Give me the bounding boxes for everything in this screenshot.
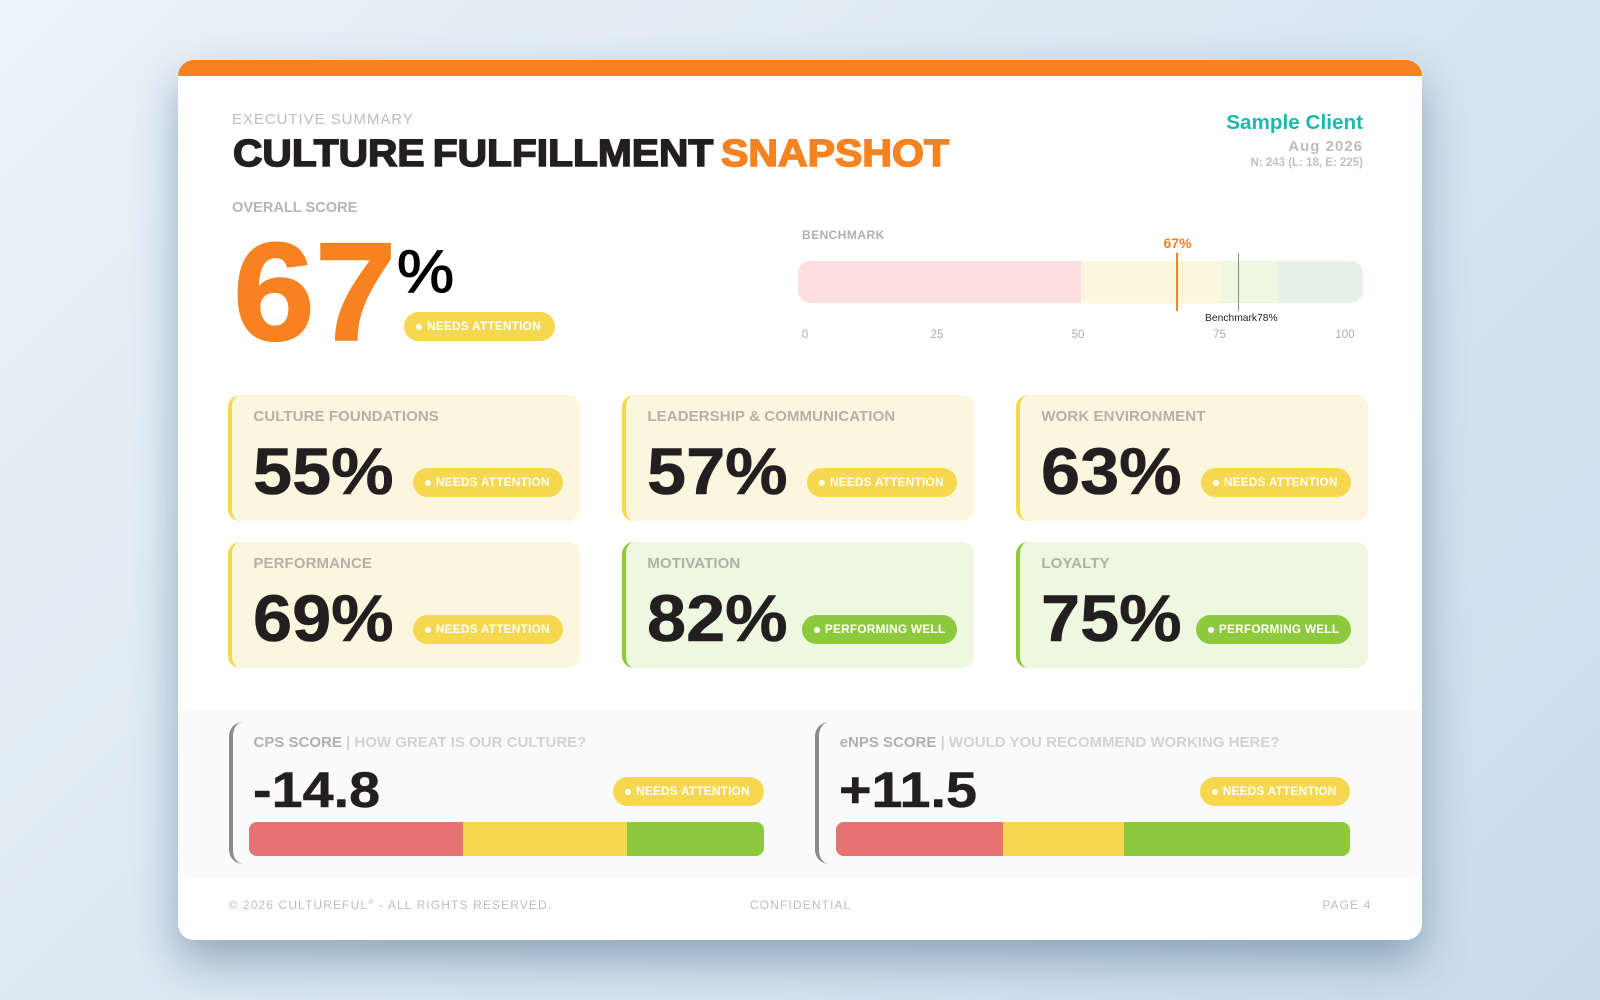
metric card: leadership and communication: NEEDS ATTENTION — [830, 475, 944, 489]
status pill: overall — [404, 312, 555, 341]
metric card: performance: 69% — [253, 581, 394, 655]
panel: eNPS score: NEEDS ATTENTION — [1223, 784, 1337, 798]
score marker label: 67% — [1164, 235, 1192, 251]
metric card: loyalty — [1016, 542, 1368, 668]
client info: Sample Client — [1226, 111, 1363, 134]
overall score label: OVERALL SCORE — [232, 200, 357, 216]
metric card: loyalty: LOYALTY — [1041, 555, 1110, 572]
panel: CPS score: CPS SCORE | HOW GREAT IS OUR CULTURE? — [254, 734, 586, 751]
title: SNAPSHOT — [720, 133, 949, 175]
bottom band — [178, 709, 1422, 877]
metric card: work environment: NEEDS ATTENTION — [1224, 475, 1338, 489]
panel: CPS score: NEEDS ATTENTION — [636, 784, 750, 798]
score marker — [1176, 253, 1178, 311]
metric card: leadership and communication: LEADERSHIP & COMMUNICATION — [647, 408, 895, 425]
benchmark marker — [1238, 253, 1239, 311]
title — [232, 133, 950, 175]
metric card: performance: PERFORMANCE — [253, 555, 372, 572]
metric card: culture foundations — [228, 395, 580, 521]
dashboard card: 100 — [1335, 329, 1355, 341]
status pill: overall: NEEDS ATTENTION — [427, 319, 541, 333]
panel: CPS score — [228, 722, 788, 864]
metric card: work environment: WORK ENVIRONMENT — [1041, 408, 1206, 425]
metric card: work environment: 63% — [1041, 434, 1182, 508]
metric card: motivation — [622, 542, 974, 668]
percent sign: % — [397, 238, 454, 305]
eyebrow: executive summary: EXECUTIVE SUMMARY — [232, 111, 414, 128]
client info: Aug 2026 — [1288, 138, 1363, 155]
client info: N: 243 (L: 18, E: 225) — [1251, 156, 1363, 168]
metric card: culture foundations: 55% — [253, 434, 394, 508]
overall score value: 67 — [233, 213, 397, 370]
dashboard card: CONFIDENTIAL — [750, 898, 851, 912]
footer — [228, 898, 1372, 912]
title: CULTURE FULFILLMENT — [232, 133, 713, 175]
metric card: motivation: PERFORMING WELL — [825, 622, 945, 636]
dashboard card: © 2026 CULTUREFUL® - ALL RIGHTS RESERVED. — [228, 898, 552, 912]
benchmark marker label: Benchmark78% — [1205, 313, 1278, 324]
panel: eNPS score: +11.5 — [839, 762, 977, 818]
metric card: performance: NEEDS ATTENTION — [436, 622, 550, 636]
panel: eNPS score: eNPS SCORE | WOULD YOU RECOMMEND WORKING HERE? — [840, 734, 1279, 751]
dashboard card: 75 — [1213, 329, 1226, 341]
metric card: performance — [228, 542, 580, 668]
metric card: loyalty: 75% — [1041, 581, 1182, 655]
panel: eNPS score — [815, 722, 1375, 864]
metric card: leadership and communication: 57% — [647, 434, 788, 508]
client info — [1226, 111, 1363, 168]
benchmark bar — [798, 261, 1363, 303]
metric card: loyalty: PERFORMING WELL — [1219, 622, 1339, 636]
metric card: work environment — [1016, 395, 1368, 521]
dashboard card: 25 — [931, 329, 943, 341]
metric card: culture foundations: NEEDS ATTENTION — [436, 475, 550, 489]
metric card: culture foundations: CULTURE FOUNDATIONS — [253, 408, 439, 425]
dashboard card: PAGE 4 — [1322, 898, 1372, 912]
metric card: motivation: MOTIVATION — [647, 555, 740, 572]
orange top bar — [178, 60, 1422, 76]
panel: CPS score: -14.8 — [252, 762, 380, 818]
metric card: motivation: 82% — [647, 581, 788, 655]
dashboard card: 0 — [802, 329, 808, 341]
benchmark label: BENCHMARK — [802, 228, 885, 242]
axis labels — [802, 329, 1355, 341]
metric card: leadership and communication — [622, 395, 974, 521]
dashboard card: 50 — [1072, 329, 1084, 341]
